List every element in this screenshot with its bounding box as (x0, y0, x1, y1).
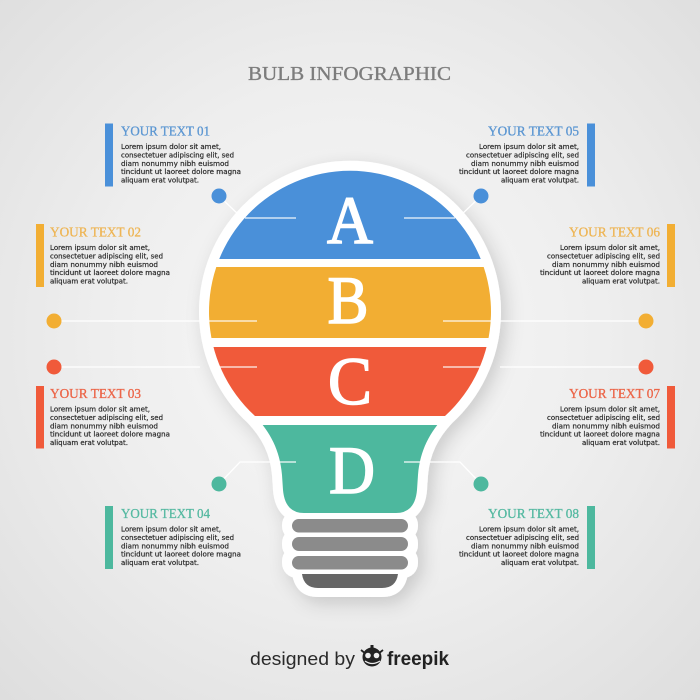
text block 04: diam nonummy nibh euismod (121, 542, 229, 550)
dot 07 (638, 360, 654, 374)
text block 03: aliquam erat volutpat. (50, 439, 128, 447)
text block 08: consectetuer adipiscing elit, sed (466, 534, 579, 542)
text block 06: aliquam erat volutpat. (582, 278, 660, 286)
text block 03: Lorem ipsum dolor sit amet, (50, 406, 150, 414)
text block 04: consectetuer adipiscing elit, sed (121, 534, 234, 542)
text block 02: diam nonummy nibh euismod (50, 261, 158, 269)
text block 05 (459, 124, 595, 186)
band A (219, 170, 481, 259)
text block 07: YOUR TEXT 07 (569, 386, 660, 401)
dot 03 (46, 360, 62, 374)
dot 05 (474, 188, 488, 204)
text block 06: YOUR TEXT 06 (569, 224, 660, 240)
text block 07: consectetuer adipiscing elit, sed (547, 414, 660, 422)
bulb coloured bands (209, 170, 491, 513)
text block 04 (105, 506, 241, 569)
text block 02: consectetuer adipiscing elit, sed (50, 252, 163, 260)
text block 06: Lorem ipsum dolor sit amet, (560, 244, 660, 252)
text block 01: Lorem ipsum dolor sit amet, (121, 143, 221, 151)
band D (262, 425, 438, 513)
text block 08: diam nonummy nibh euismod (471, 542, 579, 550)
text block 05: consectetuer adipiscing elit, sed (466, 151, 579, 159)
text block 03: consectetuer adipiscing elit, sed (50, 414, 163, 422)
text block 06: consectetuer adipiscing elit, sed (547, 252, 660, 260)
band B (209, 267, 491, 338)
text block 01: diam nonummy nibh euismod (121, 160, 229, 168)
text block 01: YOUR TEXT 01 (121, 124, 210, 138)
letter C: C (328, 343, 372, 419)
footer credit: designed by (250, 648, 356, 669)
connector lines (54, 196, 646, 484)
text block 06 (540, 224, 675, 287)
text block 02: YOUR TEXT 02 (50, 224, 141, 240)
text block 08: aliquam erat volutpat. (501, 559, 579, 567)
text block 01: tincidunt ut laoreet dolore magna (121, 168, 241, 176)
text block 05: aliquam erat volutpat. (501, 177, 579, 185)
text block 02 (36, 224, 170, 287)
text block 01: aliquam erat volutpat. (121, 177, 199, 185)
text block 03: diam nonummy nibh euismod (50, 422, 158, 430)
dot 08 (474, 476, 488, 492)
text block 04: tincidunt ut laoreet dolore magna (121, 551, 241, 559)
dot 06 (638, 314, 654, 328)
band inner lines (209, 218, 491, 462)
dot 02 (46, 314, 62, 328)
text block 07: diam nonummy nibh euismod (552, 422, 660, 430)
letter B: B (328, 262, 368, 338)
dot 01 (212, 188, 226, 204)
text block 07: Lorem ipsum dolor sit amet, (560, 406, 660, 414)
footer credit: freepik (387, 649, 449, 670)
text block 08 (459, 506, 595, 569)
text block 03: YOUR TEXT 03 (50, 386, 141, 401)
text block 03: tincidunt ut laoreet dolore magna (50, 431, 170, 439)
text block 05: YOUR TEXT 05 (488, 124, 579, 138)
letter D: D (329, 432, 375, 508)
text block 02: aliquam erat volutpat. (50, 278, 128, 286)
text block 08: tincidunt ut laoreet dolore magna (459, 551, 579, 559)
text block 02: tincidunt ut laoreet dolore magna (50, 269, 170, 277)
text block 08: Lorem ipsum dolor sit amet, (479, 526, 579, 534)
text block 08: YOUR TEXT 08 (488, 506, 579, 521)
text block 04: aliquam erat volutpat. (121, 559, 199, 567)
bulb screw base (292, 519, 408, 588)
text block 07: aliquam erat volutpat. (582, 439, 660, 447)
band C (214, 347, 486, 416)
text block 07 (540, 386, 675, 448)
letter A: A (327, 182, 373, 258)
text block 02: Lorem ipsum dolor sit amet, (50, 244, 150, 252)
text block 05: diam nonummy nibh euismod (471, 160, 579, 168)
icon: freepik mascot (361, 645, 383, 666)
text block 01 (105, 124, 241, 186)
footer credit (250, 645, 449, 670)
text block 01: consectetuer adipiscing elit, sed (121, 151, 234, 159)
text block 04: YOUR TEXT 04 (121, 506, 210, 521)
text block 04: Lorem ipsum dolor sit amet, (121, 526, 221, 534)
text block 05: tincidunt ut laoreet dolore magna (459, 168, 579, 176)
text block 03 (36, 386, 170, 448)
bulb white outline with shadow (209, 171, 491, 597)
title: BULB INFOGRAPHIC (248, 63, 451, 85)
text block 06: tincidunt ut laoreet dolore magna (540, 269, 660, 277)
text block 05: Lorem ipsum dolor sit amet, (479, 143, 579, 151)
text block 06: diam nonummy nibh euismod (552, 261, 660, 269)
text block 07: tincidunt ut laoreet dolore magna (540, 431, 660, 439)
dot 04 (212, 476, 226, 492)
